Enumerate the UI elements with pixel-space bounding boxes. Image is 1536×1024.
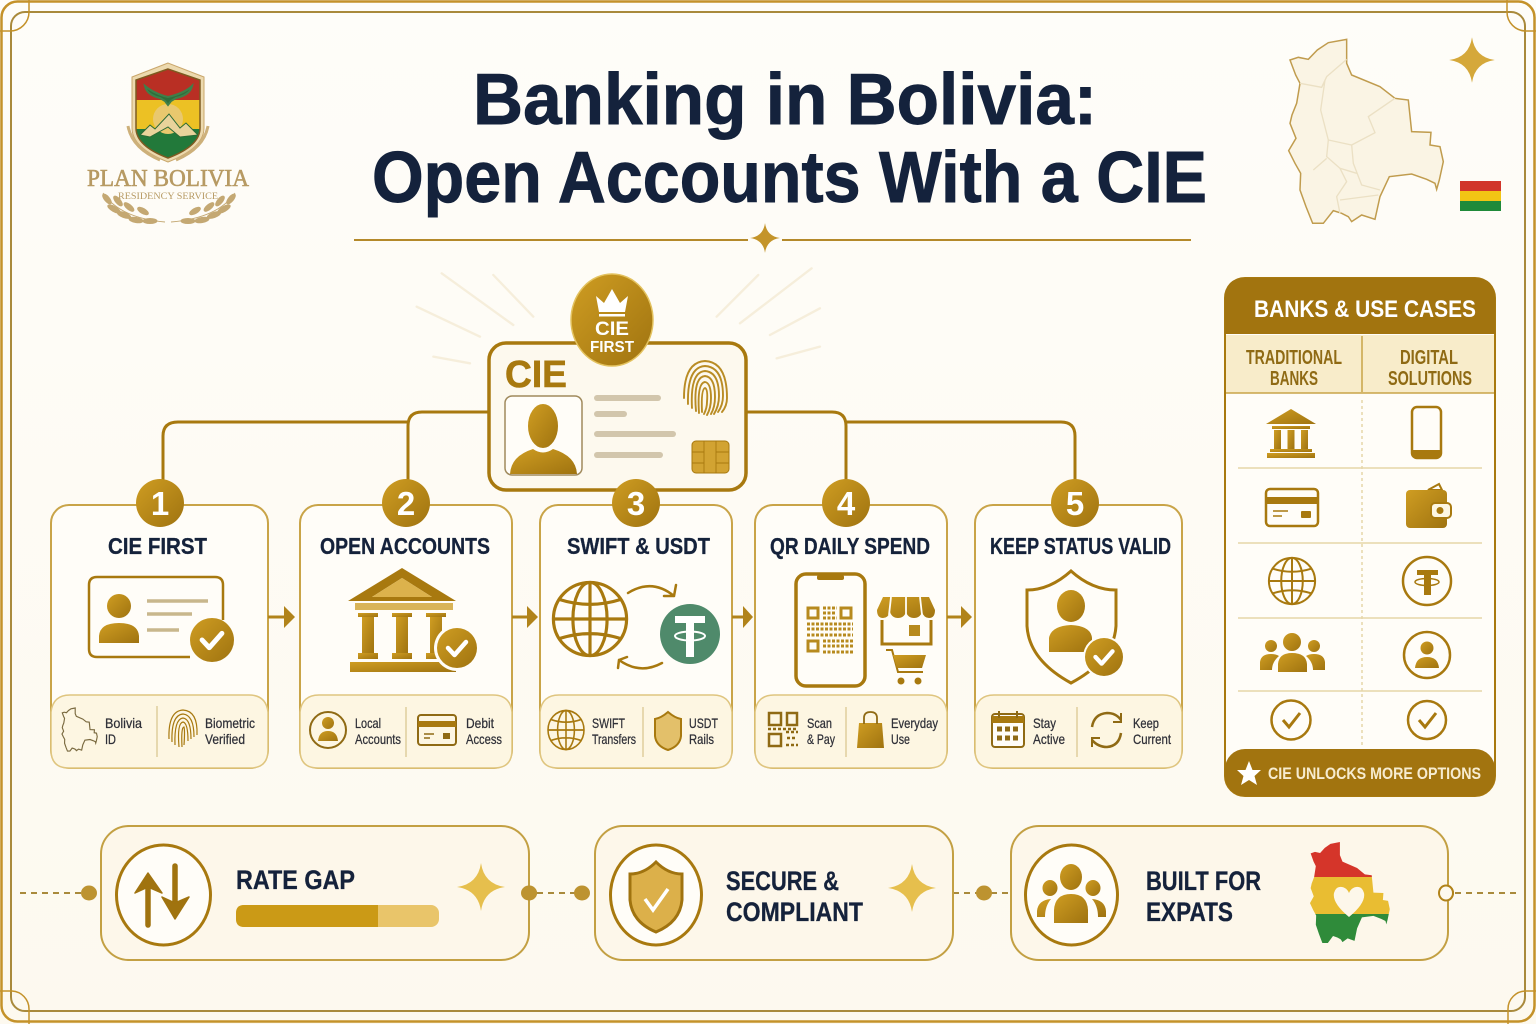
step 2 footer panel: Local <box>355 715 381 731</box>
dashed connector along bottom row <box>20 886 1518 900</box>
step 5 title: KEEP STATUS VALID <box>990 533 1171 559</box>
step 1 icon: ID check <box>89 577 234 662</box>
secure label: SECURE & <box>726 866 839 896</box>
step 4 card: QR daily spend <box>755 505 947 768</box>
benefit card: built for expats <box>1011 826 1453 960</box>
step 2 card: Open Accounts <box>300 505 512 768</box>
row icon: bank <box>1266 409 1316 458</box>
logo laurel <box>101 193 237 224</box>
icon: up and down arrows <box>116 845 210 945</box>
expats label <box>1146 866 1261 927</box>
rays behind CIE badge <box>417 268 820 363</box>
expats label: EXPATS <box>1146 897 1233 927</box>
secure label: COMPLIANT <box>726 897 863 927</box>
logo wordmark: PLAN BOLIVIA <box>87 166 250 192</box>
secure label <box>726 866 863 927</box>
card fingerprint <box>684 361 727 415</box>
step 4 title: QR DAILY SPEND <box>770 533 930 559</box>
column headers: TRADITIONAL <box>1246 347 1342 369</box>
step number badges <box>136 479 1099 527</box>
row icon: wallet <box>1406 484 1451 528</box>
panel: banks and use cases: BANKS & USE CASES <box>1254 296 1476 323</box>
icon: people <box>1026 845 1118 945</box>
column headers: SOLUTIONS <box>1388 368 1472 390</box>
row icon: check traditional <box>1272 700 1310 740</box>
step 3 footer panel: Transfers <box>592 731 636 747</box>
step 3 icon: globe and tether <box>553 582 720 668</box>
step number badges: 5 <box>1066 485 1084 522</box>
panel footer <box>1225 749 1495 796</box>
step 1 footer panel <box>51 695 268 768</box>
step 1 footer panel: Bolivia <box>105 715 142 731</box>
expats label: BUILT FOR <box>1146 866 1261 896</box>
row icon: people <box>1260 633 1325 672</box>
step number badges: 1 <box>151 485 169 522</box>
step number badges: 2 <box>397 485 415 522</box>
step 3 footer panel <box>540 695 732 768</box>
step 2 icon: bank with check <box>348 568 480 672</box>
connectors from CIE card to steps <box>163 412 1075 480</box>
row icon: card <box>1266 489 1318 526</box>
sparkle <box>457 863 505 911</box>
step 4 footer panel: Scan <box>807 715 832 731</box>
step 1 footer panel: Verified <box>205 731 245 747</box>
step 5 footer panel: Active <box>1033 731 1065 747</box>
step 5 footer panel: Keep <box>1133 715 1159 731</box>
arrows between steps <box>268 606 972 628</box>
sparkle, top right <box>1449 37 1495 83</box>
benefit card: secure and compliant <box>595 826 953 960</box>
benefit card: rate gap <box>101 826 537 960</box>
rate gap label: RATE GAP <box>236 865 355 895</box>
step 4 icon: storefront <box>877 597 935 644</box>
step 5 footer panel <box>975 695 1182 768</box>
step 4 footer panel: & Pay <box>807 731 835 747</box>
CIE First badge <box>571 274 653 366</box>
card label CIE: CIE <box>505 354 567 396</box>
step 1 title: CIE FIRST <box>108 533 207 559</box>
row icon: phone <box>1412 407 1441 458</box>
column headers: BANKS <box>1270 368 1318 390</box>
card chip <box>692 441 729 473</box>
step 3 footer panel: SWIFT <box>592 715 625 731</box>
step 2 footer panel: Accounts <box>355 731 401 747</box>
title: Open Accounts With a CIE <box>372 138 1207 218</box>
card data lines <box>594 395 676 458</box>
column headers: DIGITAL <box>1400 347 1458 369</box>
title: Banking in Bolivia: <box>473 60 1097 140</box>
step 3 footer panel: Rails <box>689 731 714 747</box>
step 4 icon: phone with QR <box>796 574 865 686</box>
panel: banks and use cases <box>1225 278 1495 796</box>
step 2 footer panel: Debit <box>466 715 494 731</box>
logo: Plan Bolivia <box>87 63 250 224</box>
icon: Bolivia map in flag colours with heart <box>1310 842 1390 943</box>
step 2 title: OPEN ACCOUNTS <box>320 533 490 559</box>
logo eagle <box>145 86 192 105</box>
map of Bolivia, top right <box>1289 39 1443 223</box>
step 4 footer panel: Use <box>891 731 910 747</box>
logo tagline: RESIDENCY SERVICE <box>118 192 218 202</box>
CIE First badge: FIRST <box>590 339 635 356</box>
step 2 footer panel <box>300 695 512 768</box>
step 5 card: Keep status valid <box>975 505 1182 768</box>
step 2 footer panel: Access <box>466 731 502 747</box>
step number badges: 4 <box>837 485 856 522</box>
CIE identity card <box>489 343 746 490</box>
icon: shield check <box>610 845 702 945</box>
rate gap bar <box>236 905 439 927</box>
column headers <box>1226 335 1494 393</box>
CIE First badge: CIE <box>595 319 629 340</box>
logo shield <box>128 63 208 162</box>
row icon: globe <box>1269 558 1315 604</box>
step 4 footer panel <box>755 695 947 768</box>
step 4 footer panel: Everyday <box>891 715 938 731</box>
step number badges: 3 <box>627 485 645 522</box>
title <box>372 60 1207 218</box>
step 4 icon: shopping cart <box>886 650 926 684</box>
step 1 card: CIE First <box>51 505 268 768</box>
row icon: tether <box>1403 557 1451 605</box>
step 3 card: SWIFT and USDT <box>540 505 732 768</box>
panel header <box>1225 278 1495 334</box>
sparkle <box>888 864 936 912</box>
Bolivian flag <box>1460 181 1501 211</box>
step 3 footer panel: USDT <box>689 715 718 731</box>
step 1 footer panel: Biometric <box>205 715 255 731</box>
row icon: check digital <box>1408 701 1446 739</box>
title divider with star <box>354 223 1191 253</box>
step 1 footer panel: ID <box>105 731 116 747</box>
panel footer: CIE UNLOCKS MORE OPTIONS <box>1268 764 1481 783</box>
step 3 title: SWIFT & USDT <box>567 533 710 559</box>
card photo <box>505 396 582 475</box>
step 5 footer panel: Current <box>1133 731 1171 747</box>
step 5 icon: shield with person <box>1027 571 1125 683</box>
crown <box>596 289 628 316</box>
step 5 footer panel: Stay <box>1033 715 1056 731</box>
row icon: person <box>1404 632 1450 678</box>
